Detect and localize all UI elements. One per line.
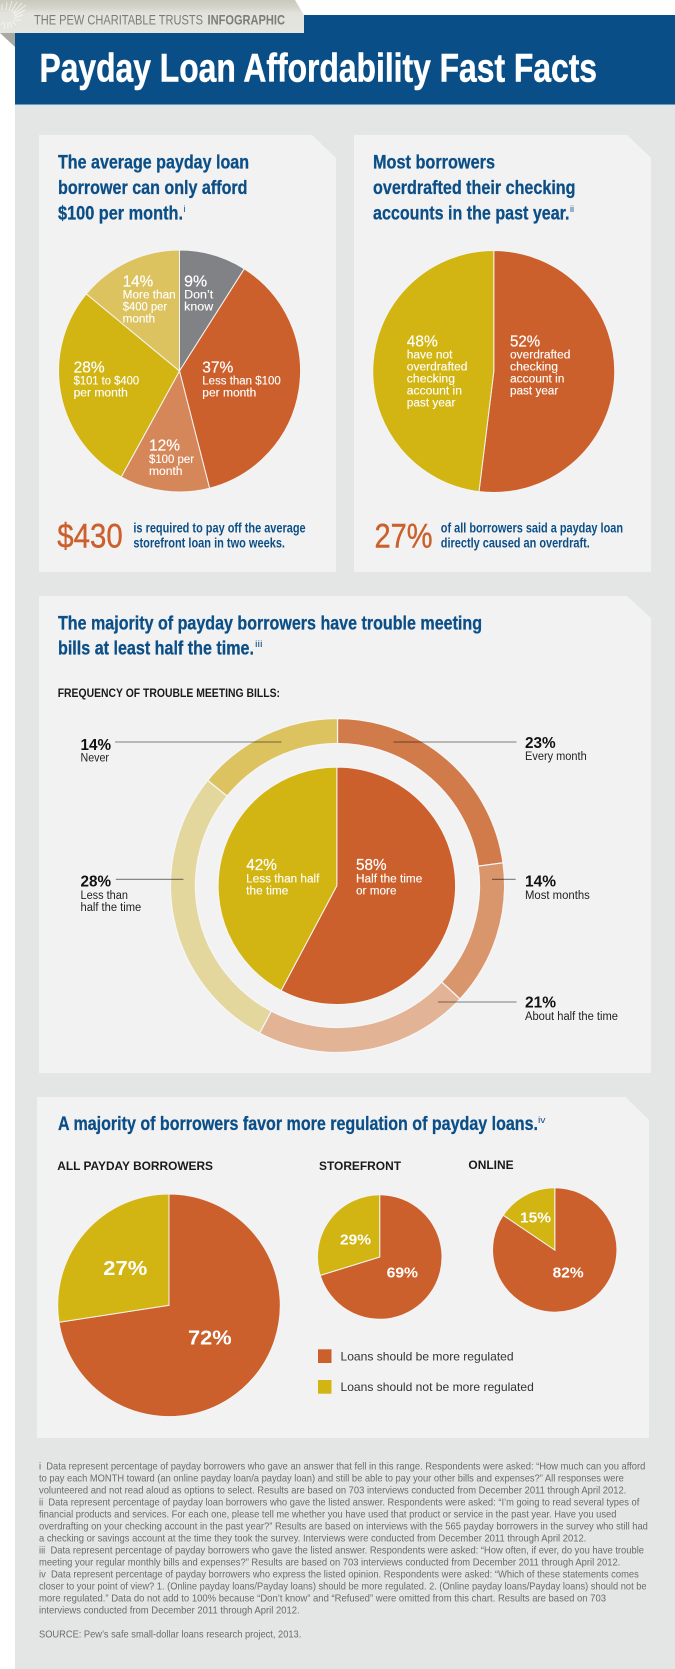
footnotes: to pay each MONTH toward (an online payday loan/a payday loan) and still be able to pay your other bills and expenses?” All responses were <box>39 1473 624 1484</box>
pie: online: 15% <box>520 1209 551 1226</box>
panel: overdrafts <box>354 135 651 572</box>
pie labels: overdrafted: overdrafted <box>407 362 468 374</box>
pie labels: affordability: More than <box>123 290 176 302</box>
donut labels: 14% <box>80 737 111 754</box>
pie: online <box>468 1160 617 1312</box>
pie: storefront: STOREFRONT <box>319 1161 401 1173</box>
ribbon: Pew infographic tag <box>0 0 304 47</box>
heading: regulation: A majority of borrowers favor more regulation of payday loans. <box>58 1113 538 1135</box>
pie labels: overdrafted: have not <box>407 350 453 362</box>
pie labels: affordability: per month <box>74 388 128 400</box>
pie labels: overdrafted: 52% <box>510 334 540 351</box>
callout: $430 <box>57 518 306 556</box>
pie labels: affordability: $100 per <box>149 454 194 466</box>
inner pie labels: 42% <box>246 857 277 874</box>
heading: affordability: $100 per month. <box>58 202 183 224</box>
pie labels: affordability: per month <box>202 388 256 400</box>
pie labels: affordability: Don’t <box>184 290 214 302</box>
heading: trouble meeting bills <box>58 612 482 659</box>
footnotes: a checking or savings account at the time they took the survey. Interviews were conducted from December 2011 through April 2012. <box>39 1533 586 1544</box>
heading: trouble meeting bills: The majority of payday borrowers have trouble meeting <box>58 612 482 634</box>
panel: trouble meeting bills <box>39 596 651 1073</box>
pie chart: overdrafted <box>373 250 615 492</box>
ribbon text: INFOGRAPHIC <box>208 12 285 28</box>
pie: all payday borrowers <box>57 1161 280 1417</box>
callout: 27%: of all borrowers said a payday loan <box>441 519 623 535</box>
legend: Loans should not be more regulated <box>340 1380 534 1394</box>
footnotes <box>39 1461 648 1640</box>
pie labels: affordability: 12% <box>149 438 180 455</box>
footnotes: interviews conducted from December 2011 through April 2012. <box>39 1605 300 1616</box>
callout: 27%: 27% <box>374 518 433 556</box>
footnotes: SOURCE: Pew’s safe small-dollar loans research project, 2013. <box>39 1629 301 1640</box>
donut labels: half the time <box>80 902 141 914</box>
inner pie labels: Less than half <box>246 874 320 886</box>
pie labels: overdrafted: 48% <box>407 334 438 351</box>
icon: sunburst logo <box>1 1 26 29</box>
pie labels: overdrafted: account in <box>407 386 462 398</box>
footnotes: volunteered and not read aloud as options to select. Results are based on 703 interviews conducted from December 2011 through April 2012. <box>39 1485 626 1496</box>
pie labels: overdrafted: past year <box>407 398 456 410</box>
footnotes: financial products and services. For each one, please tell me whether you have used that product or service in the past year. Have you used <box>39 1509 617 1520</box>
legend: Loans should be more regulated <box>340 1349 514 1363</box>
callout: $430: $430 <box>57 518 123 556</box>
pie labels: affordability: 9% <box>184 274 207 291</box>
heading: trouble meeting bills: iii <box>255 639 262 649</box>
donut labels: About half the time <box>525 1011 618 1023</box>
heading: overdrafts: Most borrowers <box>373 152 495 174</box>
donut labels: Most months <box>525 890 590 902</box>
donut labels: Less than <box>80 890 128 902</box>
pie: online: ONLINE <box>468 1160 514 1172</box>
heading: overdrafts: accounts in the past year. <box>373 202 570 224</box>
callout: $430: is required to pay off the average <box>133 519 306 535</box>
pie labels: affordability: 28% <box>74 360 105 377</box>
subheading: frequency: FREQUENCY OF TROUBLE MEETING BILLS: <box>58 688 280 700</box>
pie labels: affordability: 14% <box>123 274 153 291</box>
inner pie labels: 58% <box>356 857 387 874</box>
heading: overdrafts: ii <box>570 204 574 214</box>
donut labels: 21% <box>525 994 556 1011</box>
heading: overdrafts <box>373 152 576 224</box>
heading: regulation: iv <box>538 1115 546 1125</box>
ribbon text: THE PEW CHARITABLE TRUSTS <box>34 12 203 28</box>
inner pie labels: Half the time <box>356 874 422 886</box>
heading: affordability: The average payday loan <box>58 152 249 174</box>
pie chart: affordable monthly payment <box>59 250 301 492</box>
donut ring: frequency breakdown <box>170 718 505 1052</box>
pie labels: overdrafted: checking <box>510 362 558 374</box>
donut labels <box>80 735 618 1023</box>
heading: trouble meeting bills: bills at least half the time. <box>58 637 254 659</box>
legend <box>318 1349 534 1394</box>
heading: affordability: i <box>184 204 186 214</box>
pie: all payday borrowers: ALL PAYDAY BORROWERS <box>57 1161 213 1173</box>
pie labels: affordability: $101 to $400 <box>74 376 139 388</box>
leader lines <box>115 741 517 1003</box>
pie: online: 82% <box>553 1264 584 1281</box>
callout: $430: storefront loan in two weeks. <box>133 535 285 551</box>
pie labels: overdrafted: overdrafted <box>510 350 570 362</box>
donut labels: Every month <box>525 751 587 763</box>
header banner <box>15 15 675 105</box>
footnotes: meeting your regular monthly bills and expenses?” Results are based on 703 interviews conducted from December 2011 through April 2012. <box>39 1557 620 1568</box>
pie: storefront: 69% <box>387 1264 418 1281</box>
heading: affordability: borrower can only afford <box>58 177 248 199</box>
donut labels: 14% <box>525 874 556 891</box>
heading: affordability <box>58 152 249 224</box>
pie labels: affordability: month <box>123 314 155 326</box>
donut labels: 28% <box>80 874 111 891</box>
pie labels: affordability: $400 per <box>123 302 167 314</box>
pie: storefront: 29% <box>340 1232 371 1249</box>
donut labels: Never <box>80 753 109 765</box>
pie: storefront <box>317 1161 442 1319</box>
pie labels: overdrafted <box>407 334 570 410</box>
panel: regulation <box>37 1097 649 1438</box>
pie: all payday borrowers: 72% <box>188 1326 232 1349</box>
heading: overdrafts: overdrafted their checking <box>373 177 576 199</box>
inner pie labels: or more <box>356 886 396 898</box>
pie labels: affordability: Less than $100 <box>202 376 281 388</box>
inner pie labels <box>246 857 422 898</box>
inner pie labels: the time <box>246 886 288 898</box>
footnotes: more regulated.” Data do not add to 100% because “Don’t know” and “Refused” were omitted from this chart. Results are based on 703 <box>39 1593 606 1604</box>
pie labels: affordability: month <box>149 466 182 478</box>
pie labels: affordability: know <box>184 302 214 314</box>
donut labels: 23% <box>525 735 556 752</box>
pie labels: affordability: 37% <box>202 360 234 377</box>
callout: 27%: directly caused an overdraft. <box>441 535 590 551</box>
inner pie: half the time or more <box>218 767 456 1004</box>
pie: all payday borrowers: 27% <box>103 1257 147 1280</box>
pie labels: affordability <box>74 274 281 478</box>
callout: 27% <box>374 518 623 556</box>
panel: affordability <box>39 135 336 572</box>
pie labels: overdrafted: account in <box>510 374 564 386</box>
pie labels: overdrafted: checking <box>407 374 455 386</box>
pie labels: overdrafted: past year <box>510 386 558 398</box>
